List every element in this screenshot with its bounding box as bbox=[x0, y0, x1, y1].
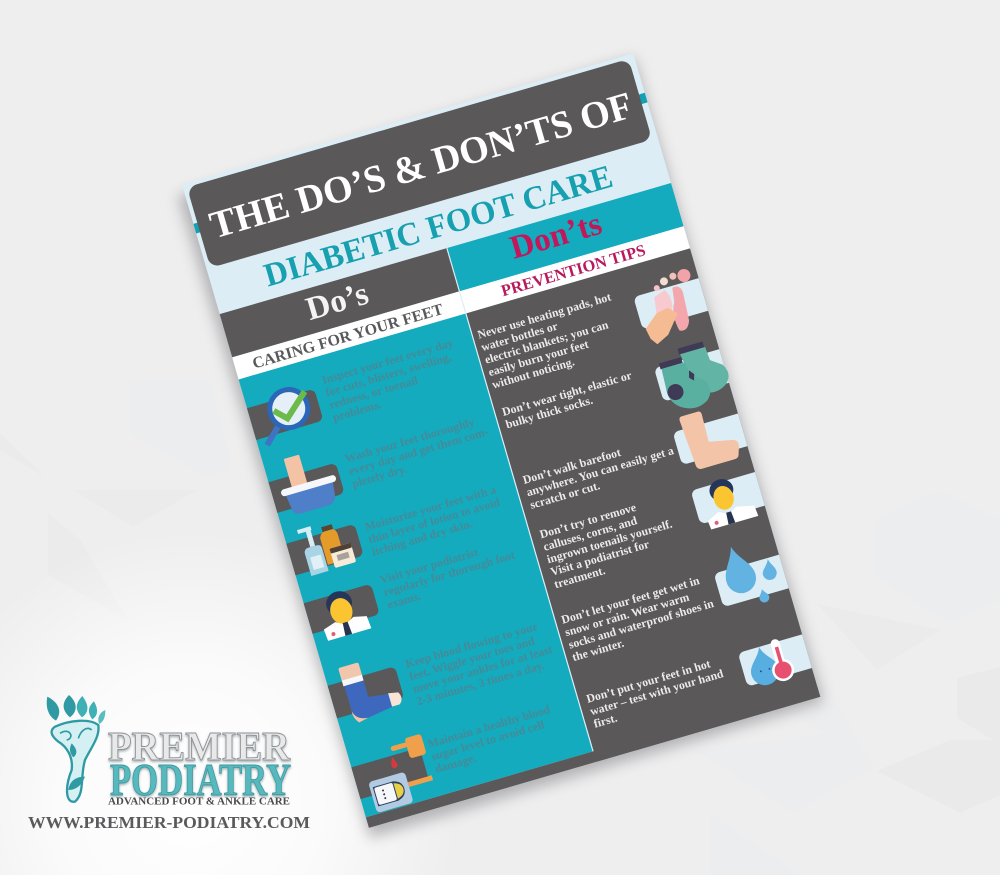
do 1: inspect text: Inspect your feet every day bbox=[320, 335, 455, 387]
panel: don'ts heading: Don’ts bbox=[506, 206, 606, 267]
subtitle: diabetic foot care: DIABETIC FOOT CARE bbox=[260, 159, 617, 294]
don't 1: heat text bbox=[476, 290, 627, 392]
don't 2: socks text: bulky thick socks. bbox=[504, 393, 594, 431]
logo icon: leafy foot bbox=[47, 695, 105, 802]
don't 4: calluses text: Don’t try to remove bbox=[538, 500, 638, 541]
do 6: blood sugar text: sugar level to avoid cell bbox=[430, 717, 547, 763]
icon: foot with blue sock bbox=[324, 653, 407, 728]
do 5: blood flow text: Keep blood flowing to your bbox=[404, 619, 539, 671]
don't 4: calluses text: ingrown toenails yourself. bbox=[545, 517, 674, 566]
icon: burned foot and hand bbox=[630, 266, 713, 347]
icon: drop and thermometer bbox=[737, 631, 813, 691]
do 2: wash text: every day and get them com- bbox=[347, 424, 490, 478]
panel: do's list column bbox=[239, 313, 593, 817]
do 1: inspect text: redness, or toenail bbox=[327, 373, 420, 412]
don't 4: calluses text: calluses, corns, and bbox=[542, 513, 639, 554]
panel: do's heading bbox=[220, 248, 460, 357]
icon: magnifier with check bbox=[245, 382, 326, 448]
bottom strip bbox=[366, 686, 820, 828]
do 1: inspect text: problems. bbox=[331, 397, 383, 424]
don't 6: hot water text: water – test with your hand bbox=[588, 666, 725, 718]
don't 6: hot water text bbox=[585, 654, 729, 731]
don't 3: barefoot text: anywhere. You can easily get a bbox=[525, 443, 675, 499]
don't 3: barefoot text: scratch or cut. bbox=[528, 478, 602, 512]
don't 6: hot water text: Don’t put your feet in hot bbox=[585, 656, 712, 706]
do 2: wash text: Wash your feet thoroughly bbox=[343, 415, 476, 466]
icon: doctor on dark tab bbox=[303, 582, 383, 644]
do 3: moisturize text: itching and dry skin. bbox=[370, 516, 474, 559]
icon: water drops bbox=[708, 534, 791, 614]
teal strip behind the header bbox=[193, 93, 648, 233]
poster shadow bbox=[178, 58, 824, 838]
logo wordmark: premier: PREMIER bbox=[108, 723, 290, 769]
don't 4: calluses text: Visit a podiatrist for bbox=[549, 537, 651, 579]
icon: doctor on light tab bbox=[690, 469, 767, 532]
panel: do's heading: Do’s bbox=[302, 276, 373, 328]
header panel: title: THE DO’S & DON’TS OF bbox=[205, 85, 638, 247]
column divider bbox=[446, 248, 594, 751]
don't 1: heat text: electric blankets; you can bbox=[483, 317, 610, 367]
don't 5: wet feet text bbox=[560, 571, 719, 664]
logo tagline: ADVANCED FOOT & ANKLE CARE bbox=[108, 796, 290, 808]
do 5: blood flow text: move your ankles for at least bbox=[411, 642, 554, 696]
logo wordmark: podiatry: PODIATRY bbox=[110, 755, 291, 805]
do 1: inspect text: for cuts, blisters, swelling, bbox=[324, 350, 453, 399]
do 4: visit podiatrist text: exams. bbox=[385, 589, 422, 612]
do 1: inspect text bbox=[320, 335, 466, 424]
band: section labels: CARING FOR YOUR FEET bbox=[251, 301, 446, 372]
don't 3: barefoot text: Don’t walk barefoot bbox=[521, 445, 622, 487]
do 4: visit podiatrist text bbox=[378, 535, 520, 612]
website address: WWW.PREMIER-PODIATRY.COM bbox=[28, 813, 310, 832]
don't 3: barefoot text bbox=[521, 431, 679, 512]
don't 5: wet feet text: snow or rain. Wear warm bbox=[563, 590, 691, 639]
don't 5: wet feet text: the winter. bbox=[570, 636, 626, 664]
don't 5: wet feet text: Don’t let your feet get wet in bbox=[560, 573, 701, 627]
poster: diabetic foot care do's and don'ts bbox=[182, 53, 822, 828]
icon: glucose meter and finger bbox=[348, 734, 439, 816]
band: section labels: PREVENTION TIPS bbox=[499, 240, 648, 300]
don't 5: wet feet text: socks and waterproof shoes in bbox=[567, 596, 716, 652]
don't 4: calluses text bbox=[538, 492, 681, 591]
do 2: wash text: pletely dry. bbox=[350, 461, 408, 491]
do 3: moisturize text: Moisturize your feet with a bbox=[363, 482, 498, 534]
don't 2: socks text: Don’t wear tight, elastic or bbox=[500, 368, 633, 419]
do 5: blood flow text bbox=[404, 617, 558, 708]
don't 1: heat text: without noticing. bbox=[490, 354, 576, 392]
do 3: moisturize text: thin layer of lotion to avoid bbox=[367, 495, 502, 546]
do 4: visit podiatrist text: regularly for thorough foot bbox=[382, 548, 516, 599]
do 5: blood flow text: feet. Wiggle your toes and bbox=[407, 633, 537, 683]
do 3: moisturize text bbox=[363, 482, 505, 559]
icon: foot in wash basin bbox=[263, 445, 347, 520]
don't 1: heat text: Never use heating pads, hot bbox=[476, 290, 613, 342]
icon: two teal socks bbox=[651, 337, 735, 416]
do 6: blood sugar text bbox=[426, 702, 559, 776]
band: section labels bbox=[232, 226, 690, 379]
icon: bare foot bbox=[669, 401, 750, 474]
do 6: blood sugar text: damage. bbox=[433, 751, 478, 776]
poster base sheet bbox=[182, 53, 820, 828]
don't 1: heat text: easily burn your feet bbox=[487, 337, 590, 379]
icon: lotion bottles and jar bbox=[284, 514, 365, 580]
do 4: visit podiatrist text: Visit your podiatrist bbox=[378, 545, 480, 587]
do 2: wash text bbox=[343, 412, 494, 491]
don't 6: hot water text: first. bbox=[592, 711, 619, 731]
panel: don'ts list column bbox=[466, 248, 820, 762]
don't 1: heat text: water bottles or bbox=[479, 319, 559, 354]
do 5: blood flow text: 2-3 minutes, 3 times a day. bbox=[415, 658, 546, 708]
don't 4: calluses text: treatment. bbox=[552, 563, 607, 591]
do 6: blood sugar text: Maintain a healthy blood bbox=[426, 702, 552, 751]
logo: premier podiatry bbox=[28, 695, 310, 832]
panel: don'ts heading bbox=[447, 183, 684, 291]
